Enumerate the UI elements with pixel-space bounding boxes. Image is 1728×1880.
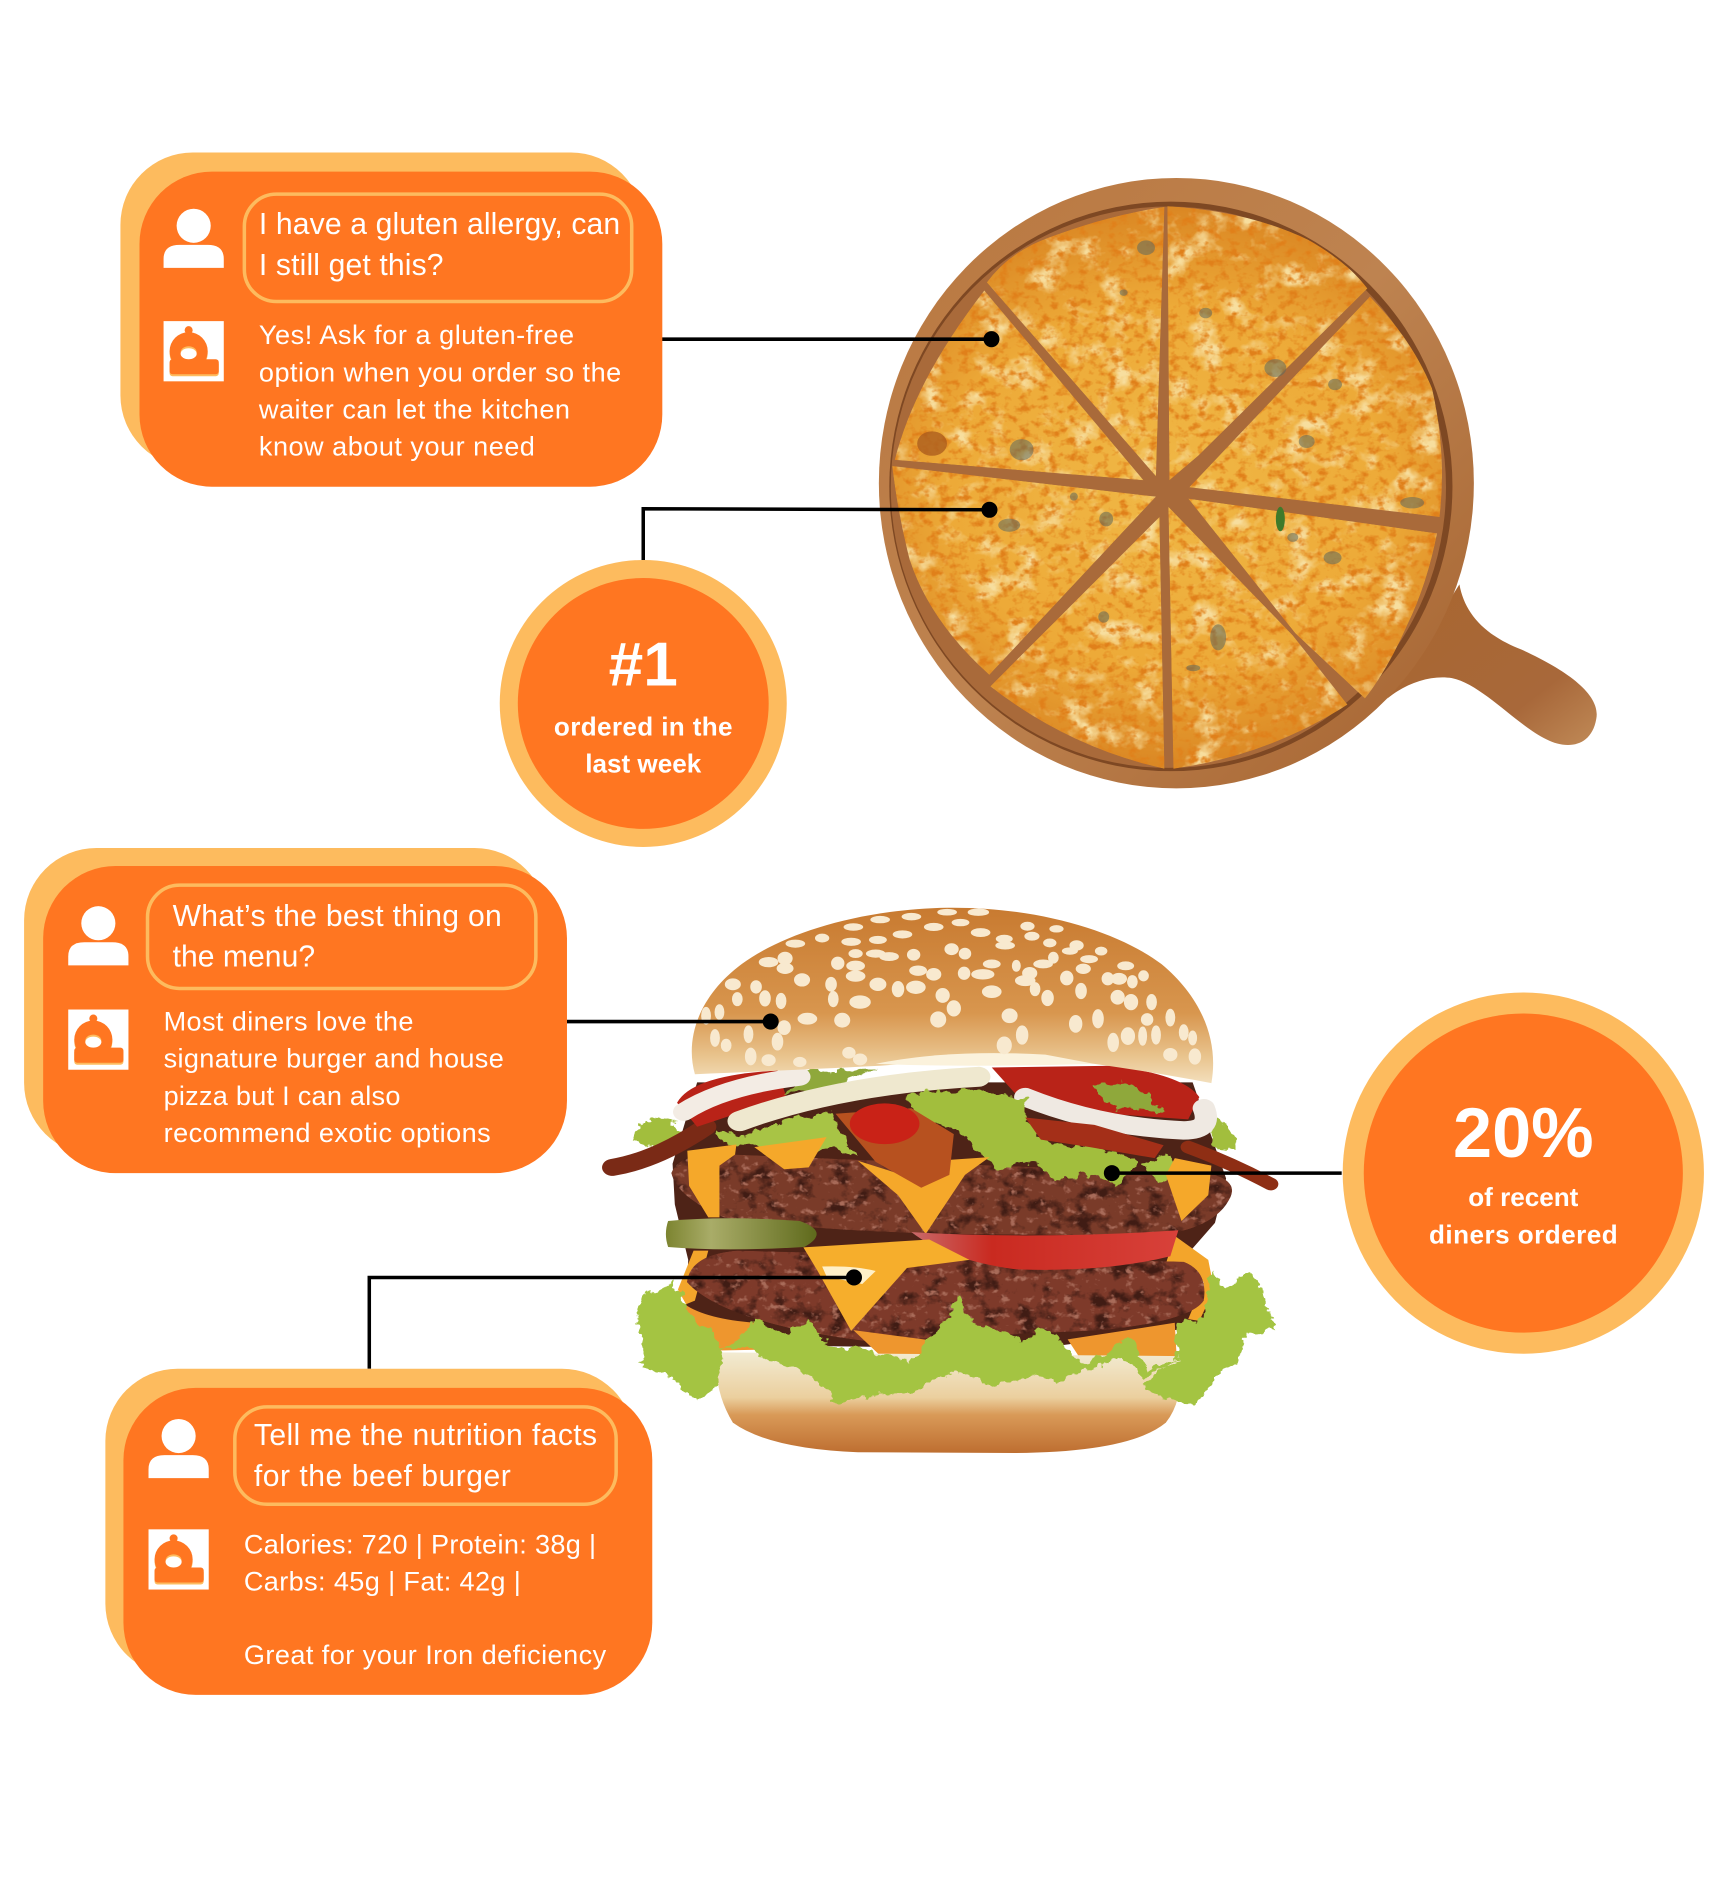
badge: number one ordered: last week xyxy=(585,749,702,779)
question bubble xyxy=(235,1407,616,1504)
connector: card two to burger xyxy=(567,1014,779,1030)
badge: twenty percent ordered xyxy=(1343,992,1704,1354)
ketchup blob xyxy=(850,1103,919,1144)
answer text: know about your need xyxy=(259,431,535,462)
question text xyxy=(259,208,620,282)
icon: user xyxy=(149,1419,209,1478)
lower patty xyxy=(687,1251,1204,1341)
connector: card one to pizza xyxy=(659,331,999,347)
cheese highlight xyxy=(822,1266,876,1284)
question text: for the beef burger xyxy=(254,1460,511,1493)
question text: I still get this? xyxy=(259,249,444,282)
toasted patch xyxy=(917,431,947,456)
answer text xyxy=(244,1528,607,1670)
badge: number one ordered: ordered in the xyxy=(554,712,733,742)
pickle slice xyxy=(666,1218,817,1249)
answer text: recommend exotic options xyxy=(164,1117,491,1148)
upper lettuce xyxy=(713,1090,1177,1186)
answer text: signature burger and house xyxy=(164,1043,504,1074)
card background xyxy=(105,1369,652,1695)
board handle xyxy=(1387,584,1597,745)
board inner xyxy=(891,207,1446,768)
card background xyxy=(24,848,567,1173)
bottom bun xyxy=(716,1352,1182,1453)
onion rings xyxy=(684,1077,1206,1130)
right bacon xyxy=(1025,1117,1164,1158)
icon: assistant xyxy=(149,1529,209,1590)
badge: number one ordered xyxy=(500,560,787,847)
answer text xyxy=(258,319,621,462)
wooden board xyxy=(879,178,1474,788)
question text xyxy=(173,900,502,973)
tomato slice xyxy=(911,1230,1178,1270)
connector: card three to burger xyxy=(369,1269,862,1369)
badge: number one ordered: #1 xyxy=(609,630,678,699)
answer text: Great for your Iron deficiency xyxy=(244,1639,607,1670)
overlay cards, badges and connectors xyxy=(24,153,1704,1695)
question text: the menu? xyxy=(173,940,315,973)
badge: twenty percent ordered: diners ordered xyxy=(1429,1219,1618,1249)
card background xyxy=(120,153,662,487)
icon: user xyxy=(68,906,128,965)
answer text: option when you order so the xyxy=(259,356,621,387)
question text: I have a gluten allergy, can xyxy=(259,208,620,241)
lower cheese edges xyxy=(678,1236,1214,1321)
answer text: Carbs: 45g | Fat: 42g | xyxy=(244,1566,521,1597)
front lettuce xyxy=(637,1271,1275,1404)
illustration: double cheeseburger xyxy=(612,908,1275,1453)
upper patty xyxy=(671,1153,1232,1236)
orange sauce xyxy=(685,1304,1177,1363)
answer text: pizza but I can also xyxy=(164,1080,400,1111)
badge: twenty percent ordered: 20% xyxy=(1453,1093,1594,1172)
panel: best thing on the menu chat xyxy=(24,848,567,1173)
upper cheese xyxy=(687,1137,1211,1234)
connector: badge one to pizza xyxy=(643,502,997,560)
question bubble xyxy=(148,885,536,988)
illustration: pizza on wooden board xyxy=(879,178,1597,788)
answer text: Yes! Ask for a gluten-free xyxy=(259,319,574,350)
icon: user xyxy=(164,209,224,268)
answer text: Calories: 720 | Protein: 38g | xyxy=(244,1528,596,1559)
filling backing xyxy=(673,1082,1226,1349)
center bacon xyxy=(836,1108,954,1188)
connector: badge two to burger xyxy=(1104,1165,1342,1181)
basil leaf xyxy=(1276,507,1285,531)
badge: twenty percent ordered: of recent xyxy=(1468,1182,1579,1212)
answer text: Most diners love the xyxy=(164,1006,413,1037)
panel: nutrition facts chat xyxy=(105,1369,652,1695)
question text: Tell me the nutrition facts xyxy=(254,1419,597,1452)
top bun with sesame xyxy=(692,908,1213,1083)
icon: assistant xyxy=(68,1010,128,1070)
bacon strips xyxy=(612,1127,1271,1184)
back lettuce xyxy=(635,1117,1235,1151)
lettuce behind onion xyxy=(782,1069,1166,1112)
answer text: waiter can let the kitchen xyxy=(258,393,570,424)
question bubble xyxy=(244,194,632,302)
panel: gluten allergy chat xyxy=(120,153,662,487)
answer text xyxy=(164,1006,504,1148)
board groove xyxy=(889,202,1452,771)
icon: assistant xyxy=(164,321,224,381)
blue cheese spots xyxy=(998,240,1424,671)
question text xyxy=(254,1419,597,1493)
ketchup xyxy=(677,1066,1199,1127)
question text: What’s the best thing on xyxy=(173,900,502,933)
lower cheese slice xyxy=(803,1240,969,1331)
pizza slices xyxy=(892,206,1442,769)
